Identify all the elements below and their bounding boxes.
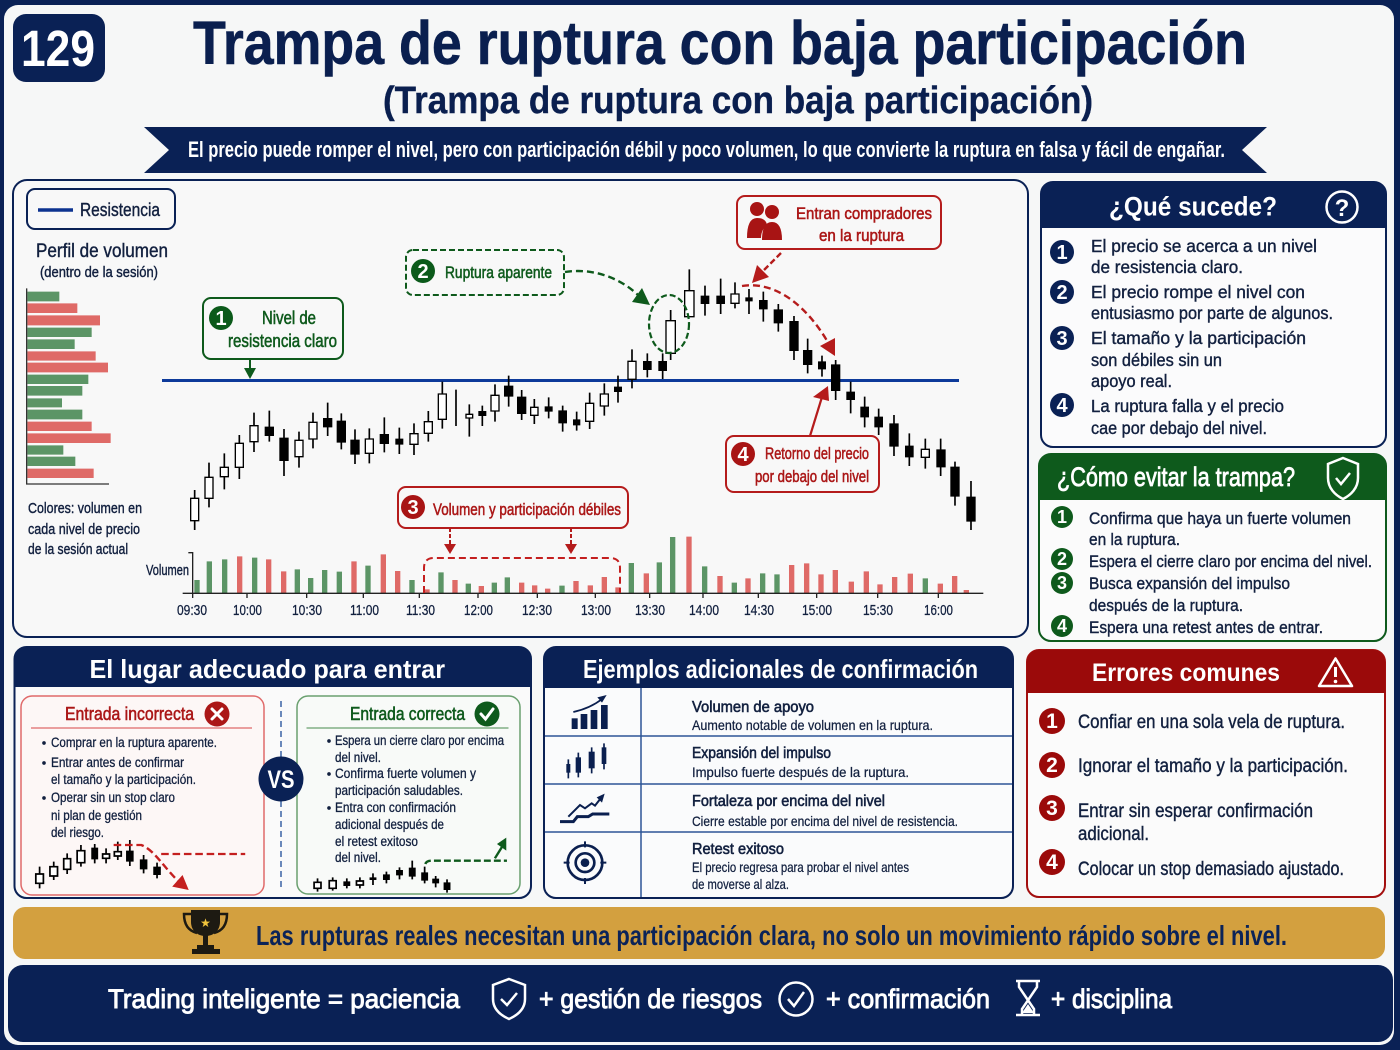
step 4: 4 — [1057, 616, 1067, 636]
bullet list: wrong entry: Operar sin un stop claro — [51, 790, 175, 805]
bullet list: correct entry — [327, 733, 504, 865]
axis: time labels: 10:30 — [292, 603, 322, 619]
step 3: El tamaño y la participación — [1091, 328, 1306, 348]
heading: El lugar adecuado para entrar — [90, 654, 445, 684]
mistake 1: Confiar en una sola vela de ruptura. — [1078, 712, 1345, 733]
mistake 3: Entrar sin esperar confirmación — [1078, 801, 1313, 822]
bullet list: wrong entry — [42, 735, 217, 840]
footer banner: Trading inteligente = paciencia — [108, 984, 461, 1014]
callout: buyers enter — [737, 196, 941, 249]
row: supporting volume: Volumen de apoyo — [692, 699, 814, 716]
axis: time labels: 09:30 — [177, 603, 207, 619]
ribbon summary — [144, 127, 1267, 173]
badge: VS — [258, 756, 304, 802]
number badge: 129 — [21, 20, 95, 77]
step 3: Busca expansión del impulso — [1089, 574, 1290, 593]
mistake 2 — [1039, 752, 1348, 778]
step 3: apoyo real. — [1091, 371, 1172, 391]
axis: time labels: 14:30 — [744, 603, 774, 619]
mistake 4 — [1039, 849, 1344, 880]
mistake 3 — [1039, 795, 1313, 845]
step 4 — [1050, 393, 1284, 438]
row: momentum expansion: Expansión del impulso — [692, 745, 831, 762]
bullet list: wrong entry: Entrar antes de confirmar — [51, 755, 184, 770]
step 4: La ruptura falla y el precio — [1091, 396, 1284, 416]
callout: buyers enter: en la ruptura — [819, 226, 904, 245]
step 2 — [1051, 548, 1372, 571]
bullet list: correct entry: participación saludables. — [335, 783, 463, 798]
note: profile colours — [28, 500, 142, 558]
footer banner: + gestión de riesgos — [539, 984, 762, 1014]
axis label: volume: Volumen — [146, 562, 189, 579]
bullet list: correct entry: adicional después de — [335, 817, 444, 832]
icon: candles — [566, 743, 606, 778]
mistake 3: 3 — [1046, 797, 1058, 820]
step 3 — [1051, 572, 1290, 615]
step 1: 1 — [1056, 242, 1068, 264]
icon: cross — [204, 702, 230, 726]
bullet list: correct entry: Espera un cierre claro por encima — [335, 733, 504, 748]
footer banner: + confirmación — [826, 984, 990, 1014]
icon: shield — [493, 979, 525, 1019]
arrow: breakout to candle — [565, 271, 650, 305]
note: profile colours: Colores: volumen en — [28, 500, 142, 517]
bullet list: wrong entry: el tamaño y la participación. — [51, 772, 196, 787]
icon: check circle — [780, 982, 812, 1016]
legend: resistance: Resistencia — [80, 200, 161, 220]
mini chart: wrong entry — [36, 840, 245, 890]
card: correct entry: Entrada correcta — [350, 704, 466, 724]
row: supporting volume — [572, 695, 933, 733]
mistake 4: 4 — [1046, 851, 1058, 874]
icon: check — [474, 702, 500, 726]
icon: shield check — [1328, 458, 1358, 499]
step 2: 2 — [1056, 282, 1068, 304]
row: strength above level: Fortaleza por encima del nivel — [692, 793, 885, 810]
arrow: peak down to level — [742, 285, 835, 356]
row: successful retest: El precio regresa para probar el nivel antes — [692, 859, 909, 875]
callout 3: weak volume: Volumen y participación débiles — [433, 500, 621, 519]
bullet list: correct entry: el retest exitoso — [335, 834, 418, 849]
mistake 3: adicional. — [1078, 824, 1149, 845]
axis: time labels: 16:00 — [924, 603, 953, 619]
footer banner: + disciplina — [1051, 984, 1173, 1014]
bullet list: correct entry: Entra con confirmación — [335, 800, 456, 815]
heading: Ejemplos adicionales de confirmación — [583, 654, 978, 684]
step 2: 2 — [1057, 549, 1067, 569]
panel: common mistakes — [1027, 650, 1385, 897]
heading: volume profile: Perfil de volumen — [36, 241, 168, 262]
icon: target — [564, 841, 606, 884]
axis: time labels: 11:00 — [350, 603, 379, 619]
card: correct entry — [297, 696, 520, 894]
card: wrong entry: Entrada incorrecta — [65, 704, 195, 724]
heading: volume profile: (dentro de la sesión) — [40, 264, 158, 281]
callout 3: weak volume — [398, 487, 628, 554]
mistake 4: Colocar un stop demasiado ajustado. — [1078, 859, 1344, 880]
heading: Errores comunes — [1092, 659, 1280, 687]
callout 1: clear resistance level: resistencia claro — [228, 331, 337, 351]
heading: ¿Cómo evitar la trampa? — [1057, 462, 1295, 492]
step 1: 1 — [1057, 507, 1067, 527]
divider — [280, 701, 282, 888]
arrow: buyers to peak — [752, 253, 781, 283]
callout 4: return below level: por debajo del nivel — [755, 467, 869, 486]
legend: resistance — [27, 189, 175, 229]
axis: time labels: 13:00 — [581, 603, 611, 619]
callout 2: apparent breakout — [406, 250, 564, 295]
callout 1: clear resistance level — [203, 298, 343, 379]
step 4: 4 — [1056, 395, 1068, 417]
footer banner — [8, 965, 1393, 1042]
icon: buyers — [747, 202, 782, 240]
axis: time labels: 14:00 — [689, 603, 719, 619]
mistake 1 — [1039, 708, 1345, 734]
bullet list: correct entry: del nivel. — [335, 750, 381, 765]
icon: rising bars — [572, 695, 608, 729]
step 2: entusiasmo por parte de algunos. — [1091, 303, 1333, 323]
axis: time labels: 12:30 — [522, 603, 552, 619]
bullet list: correct entry: del nivel. — [335, 850, 381, 865]
step 3: 3 — [1057, 573, 1067, 593]
callout 4: return below level: Retorno del precio — [765, 444, 869, 463]
step 4: Espera una retest antes de entrar. — [1089, 618, 1323, 637]
panel: chart — [13, 180, 1028, 637]
row: successful retest: de moverse al alza. — [692, 876, 789, 892]
icon: question: ? — [1335, 195, 1349, 222]
mistake 2: 2 — [1046, 754, 1058, 777]
row: momentum expansion — [566, 743, 909, 780]
step 3: son débiles sin un — [1091, 350, 1222, 370]
step 2 — [1050, 280, 1333, 323]
subtitle: (Trampa de ruptura con baja participación) — [383, 80, 1093, 122]
title: Trampa de ruptura con baja participación — [193, 9, 1247, 77]
badge: VS: VS — [268, 766, 294, 794]
axis: time labels: 13:30 — [635, 603, 665, 619]
icon: question — [1326, 192, 1358, 222]
row: successful retest: Retest exitoso — [692, 841, 784, 858]
chart: candlesticks — [191, 269, 976, 530]
axis: time labels: 15:00 — [802, 603, 832, 619]
axis: time labels: 11:30 — [406, 603, 435, 619]
panel: additional confirmations — [544, 647, 1013, 898]
axis: time labels — [177, 603, 953, 619]
mini chart: correct entry — [314, 838, 507, 893]
gold key message banner — [13, 907, 1385, 959]
step 4: cae por debajo del nivel. — [1091, 418, 1267, 438]
step 1: El precio se acerca a un nivel — [1091, 236, 1317, 256]
icon: step and arrow — [560, 794, 609, 822]
mistake 2: Ignorar el tamaño y la participación. — [1078, 756, 1348, 777]
arrow: return below level — [810, 386, 829, 436]
step 4 — [1051, 615, 1323, 637]
callout 2: apparent breakout: 2 — [417, 261, 429, 283]
mistake 1: 1 — [1046, 710, 1058, 733]
icon: warning — [1319, 658, 1352, 686]
axis: time labels: 12:00 — [464, 603, 493, 619]
row: momentum expansion: Impulso fuerte después de la ruptura. — [692, 764, 909, 780]
step 3: 3 — [1056, 328, 1068, 350]
bullet list: wrong entry: del riesgo. — [51, 825, 104, 840]
axis: time labels: 15:30 — [863, 603, 893, 619]
heading: ¿Qué sucede? — [1109, 192, 1277, 222]
row: successful retest — [564, 841, 909, 892]
heading: volume profile — [36, 241, 168, 281]
row: supporting volume: Aumento notable de volumen en la ruptura. — [692, 717, 933, 733]
step 1: en la ruptura. — [1089, 530, 1180, 549]
card: wrong entry — [21, 696, 264, 895]
step 1: Confirma que haya un fuerte volumen — [1089, 509, 1351, 528]
panel: how to avoid — [1039, 454, 1386, 641]
step 2: El precio rompe el nivel con — [1091, 282, 1305, 302]
callout 2: apparent breakout: Ruptura aparente — [445, 263, 552, 282]
panel: what happens — [1041, 182, 1386, 447]
row: strength above level: Cierre estable por encima del nivel de resistencia. — [692, 813, 958, 829]
axis: time labels: 10:00 — [233, 603, 262, 619]
icon: trophy: ★ — [200, 916, 211, 930]
step 1 — [1050, 236, 1317, 277]
step 3: después de la ruptura. — [1089, 596, 1243, 615]
callout: buyers enter: Entran compradores — [796, 204, 932, 223]
step 1: de resistencia claro. — [1091, 257, 1243, 277]
icon: trophy — [184, 910, 227, 954]
callout 3: weak volume: 3 — [407, 497, 419, 519]
callout 4: return below level — [726, 436, 879, 492]
icon: hourglass — [1016, 981, 1040, 1015]
chart: volume bars — [183, 537, 983, 598]
highlight: weak volume zone — [424, 558, 620, 593]
row: strength above level — [560, 793, 958, 829]
panel: right place to enter — [14, 647, 531, 898]
line: resistance level — [162, 379, 959, 382]
bullet list: wrong entry: ni plan de gestión — [51, 808, 142, 823]
note: profile colours: cada nivel de precio — [28, 521, 140, 538]
step 3 — [1050, 326, 1306, 391]
bullet list: correct entry: Confirma fuerte volumen y — [335, 766, 476, 781]
step 1 — [1051, 506, 1351, 549]
chart: volume profile bars — [27, 288, 111, 484]
callout 1: clear resistance level: 1 — [215, 308, 227, 330]
note: profile colours: de la sesión actual — [28, 541, 128, 558]
callout 1: clear resistance level: Nivel de — [262, 308, 316, 328]
bullet list: wrong entry: Comprar en la ruptura aparente. — [51, 735, 217, 750]
callout 4: return below level: 4 — [737, 444, 749, 466]
highlight: breakout candle ring — [649, 295, 689, 353]
